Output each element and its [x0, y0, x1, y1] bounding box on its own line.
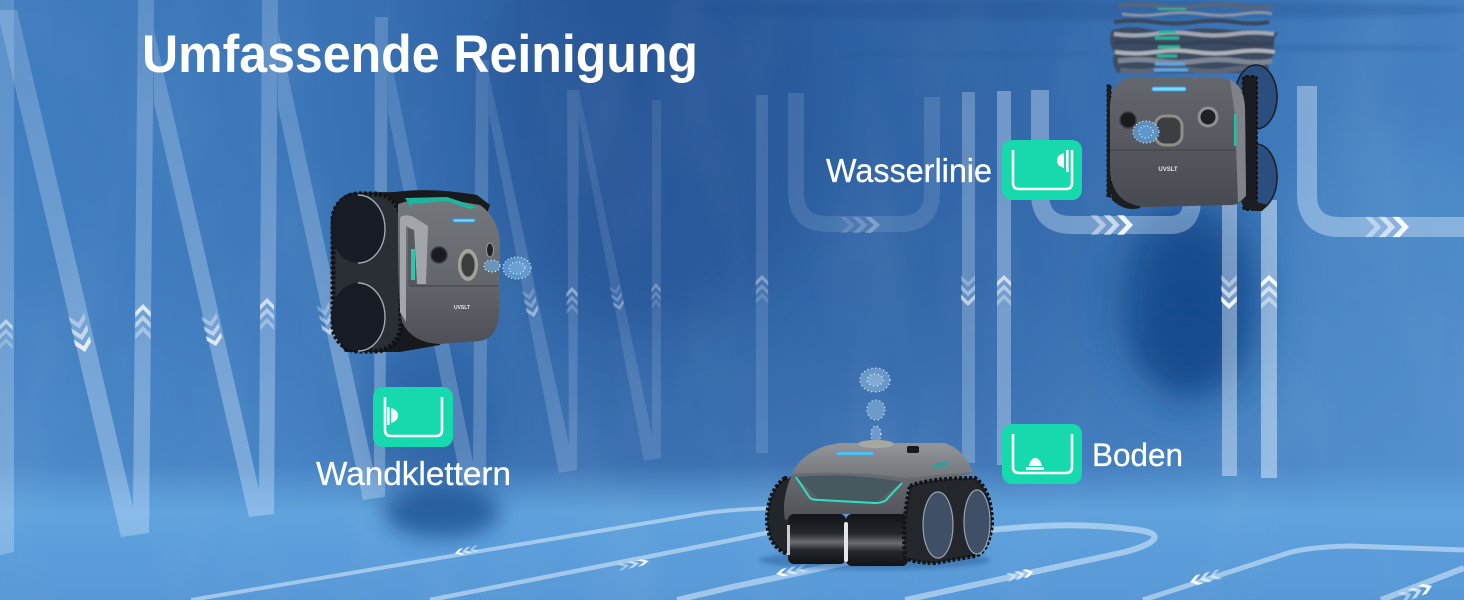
water jet bubbles	[1133, 121, 1159, 143]
wheel discs	[1235, 65, 1277, 210]
body front	[784, 472, 975, 520]
lid	[792, 443, 973, 487]
icon: waterline	[1002, 140, 1082, 200]
blue LED	[1152, 87, 1186, 91]
floor lane lines	[191, 508, 1464, 600]
title: Umfassende Reinigung	[142, 25, 698, 84]
silver side strip	[400, 215, 428, 322]
water jet bubbles	[484, 257, 531, 279]
body shell	[1110, 78, 1246, 207]
teal trim	[796, 477, 902, 503]
blue LED	[453, 219, 475, 222]
shadow: wall-climbing robot	[360, 340, 500, 538]
label: Boden: Boden	[1092, 437, 1183, 473]
direction chevrons on right wall	[756, 215, 1409, 309]
top connector	[907, 446, 919, 453]
robot: wall climbing	[331, 190, 531, 352]
U-shaped waterline paths	[796, 86, 1464, 227]
right track	[1243, 76, 1257, 210]
teal handle	[405, 197, 477, 209]
filter fan	[458, 249, 478, 281]
bottom tracks	[1110, 180, 1145, 209]
body shell	[398, 199, 500, 344]
side badge	[933, 461, 949, 469]
top nozzle	[858, 440, 894, 448]
lower seam	[410, 285, 498, 287]
camera right	[1199, 108, 1217, 126]
left track	[767, 478, 800, 555]
left track edge	[1107, 85, 1111, 197]
teal side light	[1234, 114, 1236, 146]
water fountain	[860, 368, 890, 442]
brand mark: UVSLT	[1158, 167, 1178, 173]
sensor	[486, 243, 494, 257]
wheel discs	[923, 490, 990, 558]
icon: wall climbing	[373, 387, 453, 447]
wheel discs	[331, 195, 385, 351]
brush roller	[787, 514, 908, 566]
blue LED	[837, 452, 873, 455]
teal side light	[411, 249, 415, 280]
floor direction chevrons	[454, 545, 1434, 600]
label: Wandklettern: Wandklettern	[316, 455, 511, 492]
right track	[904, 478, 992, 563]
window	[796, 475, 902, 503]
camera	[431, 247, 447, 263]
label: Wasserlinie: Wasserlinie	[826, 152, 992, 189]
filter fan	[1155, 116, 1182, 145]
waterline reflection	[1110, 4, 1278, 73]
robot: floor	[760, 368, 992, 570]
track with teeth	[333, 194, 401, 351]
water surface ripples	[690, 0, 1464, 56]
brand mark: UVSLT	[454, 305, 470, 311]
shadow: waterline robot	[1122, 200, 1258, 400]
direction chevrons on zigzag path	[0, 283, 661, 354]
lower seam	[1110, 149, 1236, 151]
silver edge	[1230, 80, 1246, 203]
icon: floor	[1002, 424, 1082, 484]
robot: waterline	[1107, 4, 1278, 211]
vertical wall bars	[756, 91, 1277, 478]
camera left	[1120, 112, 1136, 128]
zigzag wall path	[0, 0, 661, 555]
